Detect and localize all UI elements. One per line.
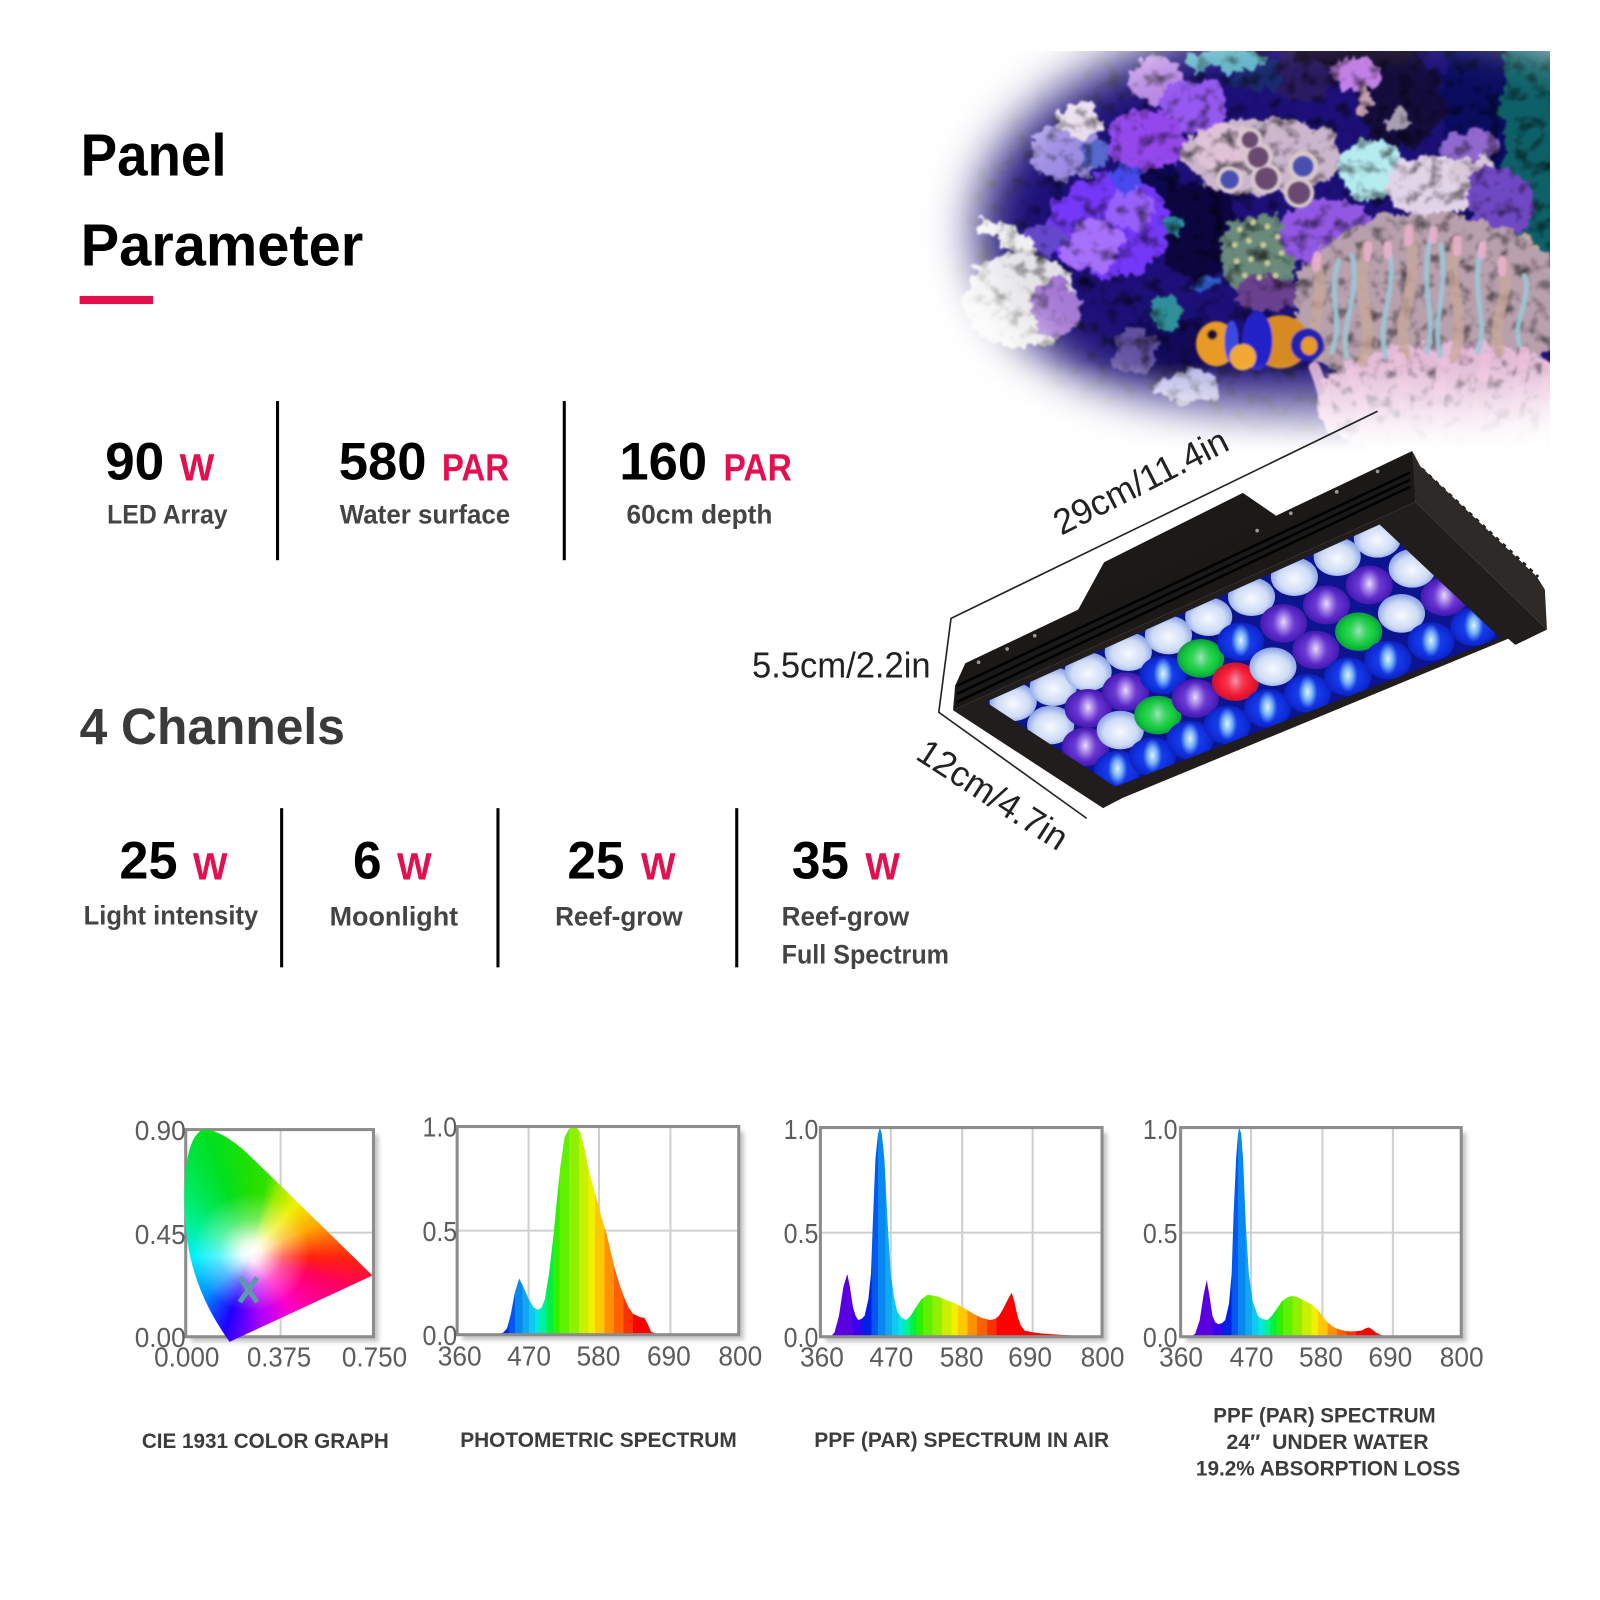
- axis labels: 800: [1081, 1341, 1124, 1372]
- stat: 6 W Moonlight: W: [397, 846, 432, 888]
- chart: photometric spectrum: [422, 1112, 762, 1371]
- dimension label: height: 5.5cm/2.2in: [752, 646, 931, 686]
- stat: 160 PAR 60cm depth: [619, 433, 792, 529]
- axis labels: 690: [1368, 1341, 1412, 1372]
- stat: 35 W Reef-grow Full Spectrum: 35: [792, 832, 849, 891]
- axis labels: 0.45: [135, 1219, 186, 1250]
- axis labels: 0.750: [342, 1341, 407, 1372]
- axis labels: 0.375: [247, 1341, 311, 1372]
- stat: 25 W Light intensity: 25: [119, 832, 178, 891]
- stat: 6 W Moonlight: Moonlight: [330, 902, 458, 932]
- chart: CIE 1931 color graph: [135, 1115, 407, 1372]
- stat: 25 W Reef-grow: Reef-grow: [555, 902, 683, 932]
- dimension label: width: 12cm/4.7in: [910, 731, 1075, 858]
- title: Panel Parameter: [81, 122, 363, 278]
- axis labels: 0.0: [784, 1322, 818, 1353]
- axis labels: 360: [438, 1340, 482, 1371]
- stat: 6 W Moonlight: 6: [353, 832, 382, 891]
- axis labels: [135, 1115, 407, 1372]
- dimension lines: [939, 411, 1378, 818]
- axis labels: 0.00: [135, 1322, 186, 1353]
- axis labels: 0.90: [135, 1115, 186, 1146]
- stat: 580 PAR water surface: PAR: [442, 447, 509, 489]
- axis labels: 360: [1159, 1341, 1203, 1372]
- axis labels: 580: [940, 1341, 984, 1372]
- chart caption: photometric: PHOTOMETRIC SPECTRUM: [460, 1428, 737, 1452]
- stat: 160 PAR 60cm depth: 60cm depth: [627, 499, 772, 529]
- axis labels: 470: [1230, 1341, 1273, 1372]
- stat: 160 PAR 60cm depth: 160: [619, 433, 707, 492]
- stat: 160 PAR 60cm depth: PAR: [723, 447, 792, 489]
- axis labels: 0.0: [1143, 1322, 1178, 1353]
- stat: 6 W Moonlight: [330, 832, 458, 932]
- rear rail: [953, 451, 1415, 710]
- stat: 90 W LED Array: [105, 433, 228, 529]
- title: Panel Parameter: Parameter: [81, 211, 363, 278]
- axis labels: 0.5: [1143, 1218, 1178, 1249]
- axis labels: 1.0: [1143, 1114, 1178, 1145]
- chart caption: under water: PPF (PAR) SPECTRUM: [1213, 1403, 1436, 1427]
- stat: 35 W Reef-grow Full Spectrum: Reef-grow: [782, 902, 910, 932]
- stat: 25 W Light intensity: [84, 832, 258, 930]
- dimension label: length: 29cm/11.4in: [1047, 421, 1235, 543]
- stat: 25 W Reef-grow: [555, 832, 683, 932]
- title accent bar: [80, 296, 153, 304]
- axis labels: 580: [577, 1340, 620, 1371]
- stat: 25 W Light intensity: W: [193, 846, 228, 888]
- stat: 580 PAR water surface: 580: [339, 433, 427, 492]
- chart: PPF PAR spectrum in air: [784, 1114, 1124, 1372]
- axis labels: [1143, 1114, 1484, 1372]
- axis labels: 0.5: [422, 1216, 457, 1247]
- stat: 90 W LED Array: 90: [105, 433, 164, 492]
- stat: 35 W Reef-grow Full Spectrum: W: [865, 846, 900, 888]
- stat: 90 W LED Array: LED Array: [107, 499, 228, 529]
- axis labels: [784, 1114, 1124, 1372]
- CIE color gamut: [184, 1130, 372, 1342]
- axis labels: 1.0: [784, 1114, 818, 1145]
- stat: 25 W Light intensity: Light intensity: [84, 900, 258, 930]
- axis labels: 800: [718, 1340, 762, 1371]
- chart: PPF PAR spectrum under water: [1143, 1114, 1484, 1372]
- stat row: panel output: [105, 401, 792, 560]
- axis labels: 690: [1008, 1341, 1052, 1372]
- spectrum curve: [496, 1127, 662, 1335]
- heading: 4 Channels: 4 Channels: [80, 698, 345, 755]
- icon: clownfish: [1196, 311, 1323, 370]
- chart caption: under water: 19.2% ABSORPTION LOSS: [1196, 1457, 1460, 1481]
- front frame: [953, 502, 1547, 808]
- photo: coral reef aquarium with clownfish: [938, 51, 1550, 445]
- spectrum curve: [831, 1128, 1096, 1337]
- stat: 35 W Reef-grow Full Spectrum: [782, 832, 949, 969]
- LED panel light fixture: [953, 451, 1547, 808]
- axis labels: 470: [507, 1340, 551, 1371]
- stat: 35 W Reef-grow Full Spectrum: Full Spectrum: [782, 939, 949, 969]
- axis labels: 690: [647, 1340, 691, 1371]
- axis labels: 0.0: [422, 1320, 457, 1351]
- chart caption: CIE: CIE 1931 COLOR GRAPH: [142, 1429, 389, 1453]
- chromaticity marker: [240, 1278, 257, 1302]
- axis labels: 0.5: [784, 1218, 818, 1249]
- axis labels: 800: [1440, 1341, 1484, 1372]
- chart caption: under water: [1196, 1403, 1460, 1481]
- axis labels: 580: [1299, 1341, 1343, 1372]
- LED lenses: [990, 519, 1497, 789]
- LED window: [986, 524, 1500, 787]
- mounting bracket: [1074, 493, 1276, 633]
- title: Panel Parameter: Panel: [81, 122, 227, 189]
- stat: 25 W Reef-grow: 25: [567, 832, 624, 891]
- stat: 25 W Reef-grow: W: [641, 846, 676, 888]
- axis labels: [422, 1112, 762, 1371]
- stat row: channels: [84, 808, 949, 969]
- stat: 580 PAR water surface: Water surface: [340, 499, 510, 529]
- stat: 580 PAR water surface: [339, 433, 510, 529]
- axis labels: 0.000: [154, 1341, 219, 1372]
- spectrum curve: [1191, 1128, 1394, 1337]
- heat sink side: [1412, 451, 1547, 630]
- axis labels: 470: [869, 1341, 913, 1372]
- axis labels: 1.0: [422, 1112, 457, 1143]
- axis labels: 360: [800, 1341, 844, 1372]
- stat: 90 W LED Array: W: [180, 447, 215, 489]
- chart caption: under water: 24″ UNDER WATER: [1227, 1430, 1429, 1454]
- chart caption: in air: PPF (PAR) SPECTRUM IN AIR: [814, 1428, 1110, 1452]
